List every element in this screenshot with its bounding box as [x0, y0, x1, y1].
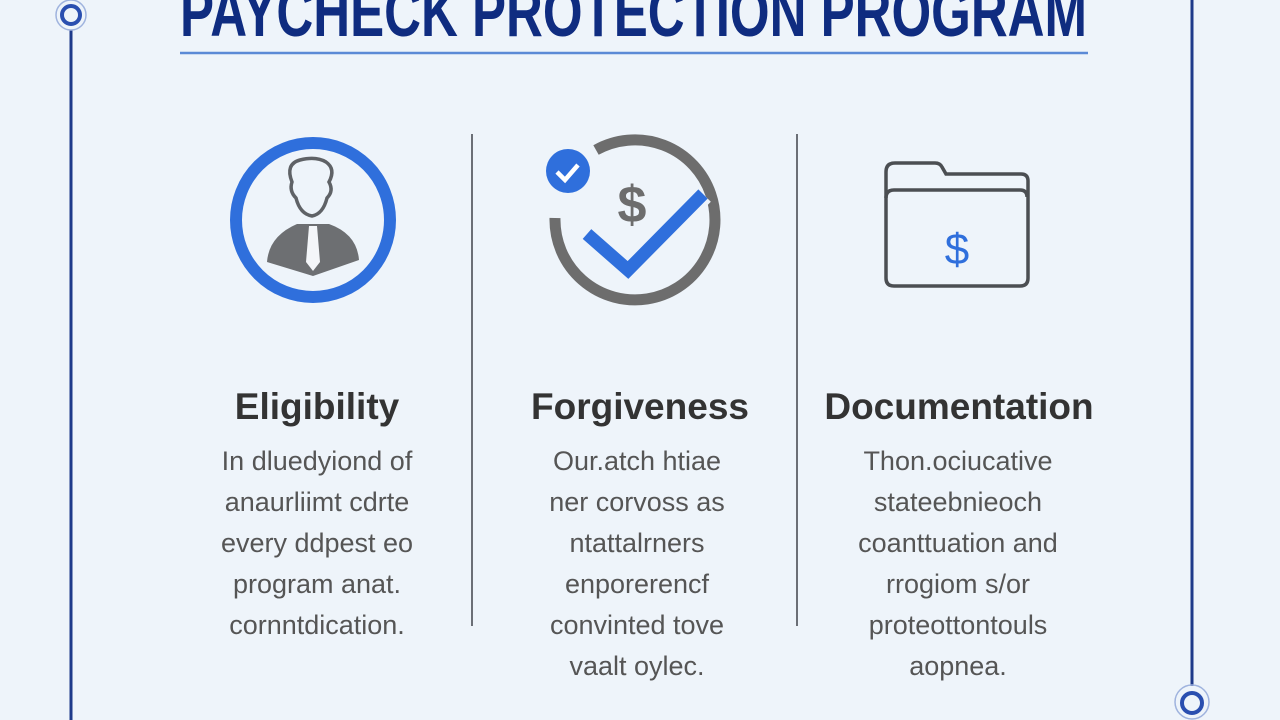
- text: documentation body: [858, 446, 1058, 681]
- left frame line with node: [56, 0, 86, 720]
- text: eligibility body: In dluedyiond of: [222, 446, 413, 476]
- text: eligibility body: program anat.: [233, 569, 401, 599]
- text: forgiveness body: vaalt oylec.: [569, 651, 705, 681]
- heading: eligibility: Eligibility: [235, 386, 400, 427]
- text: forgiveness body: enporerencf: [565, 569, 710, 599]
- text: eligibility body: every ddpest eo: [221, 528, 413, 558]
- column: documentation: [824, 386, 1094, 681]
- heading: forgiveness: Forgiveness: [531, 386, 749, 427]
- right frame line with node: [1175, 0, 1209, 719]
- text: documentation body: rrogiom s/or: [886, 569, 1030, 599]
- text: documentation body: proteottontouls: [869, 610, 1047, 640]
- text: eligibility body: anaurliimt cdrte: [225, 487, 409, 517]
- icon: forgiveness check: $: [618, 176, 647, 234]
- text: documentation body: aopnea.: [909, 651, 1007, 681]
- text: forgiveness body: convinted tove: [550, 610, 724, 640]
- text: forgiveness body: ntattalrners: [569, 528, 705, 558]
- column: forgiveness: [531, 386, 749, 681]
- column: eligibility: [221, 386, 413, 640]
- icon: folder with dollar: [886, 163, 1028, 286]
- text: eligibility body: cornntdication.: [229, 610, 405, 640]
- text: forgiveness body: ner corvoss as: [549, 487, 725, 517]
- text: documentation body: coanttuation and: [858, 528, 1058, 558]
- text: documentation body: stateebnieoch: [874, 487, 1042, 517]
- icon: forgiveness check: [541, 140, 715, 300]
- text: eligibility body: [221, 446, 413, 640]
- column dividers: [472, 134, 797, 626]
- icon: folder with dollar: $: [945, 225, 969, 274]
- text: forgiveness body: [549, 446, 725, 681]
- text: documentation body: Thon.ociucative: [863, 446, 1053, 476]
- heading: documentation: Documentation: [824, 386, 1094, 427]
- icon: person in circle: [236, 143, 390, 297]
- text: forgiveness body: Our.atch htiae: [553, 446, 721, 476]
